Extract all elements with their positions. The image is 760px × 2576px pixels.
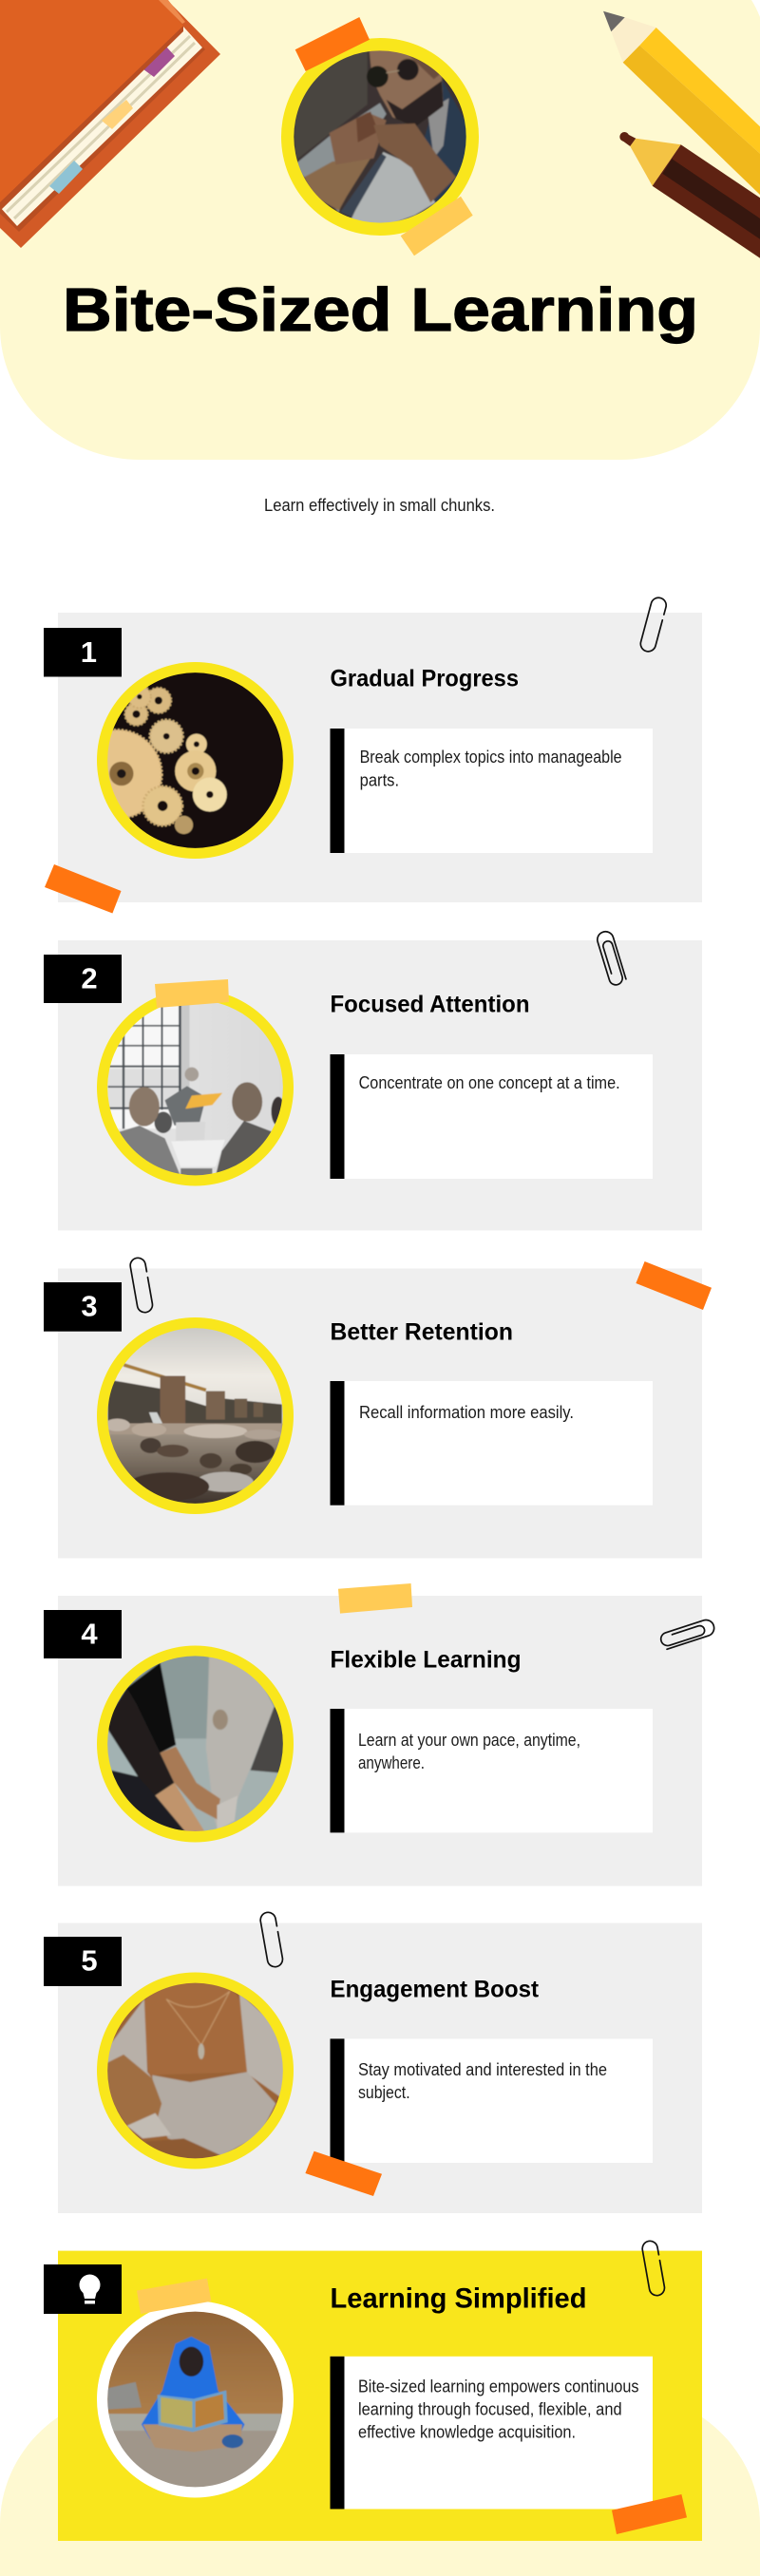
- header photo: man eating: [281, 38, 479, 236]
- panel: step 2 focused attention: [58, 940, 702, 1230]
- photo: ballet shoes: [97, 1645, 294, 1843]
- tape: orange conclusion: [612, 2494, 687, 2534]
- paperclip 2: [596, 930, 627, 987]
- text box: effective knowledge acquisition.: [358, 2422, 576, 2441]
- bottom background blob: [0, 2392, 760, 2576]
- paperclip 5: [259, 1911, 284, 1968]
- number badge 2: 2: [81, 961, 98, 995]
- tape: orange step 1: [45, 864, 122, 914]
- tape: yellow conclusion: [137, 2279, 211, 2314]
- number badge 5: 5: [81, 1943, 98, 1978]
- text box: [331, 1381, 653, 1506]
- number badge 3: 3: [81, 1290, 98, 1323]
- text box: Recall information more easily.: [359, 1402, 574, 1422]
- panel: step 4 flexible learning: [58, 1596, 702, 1886]
- text box: parts.: [360, 769, 399, 790]
- photo: gears: [97, 662, 294, 859]
- number badge 1: [44, 628, 122, 676]
- text box: Concentrate on one concept at a time.: [359, 1072, 620, 1092]
- text box: Learn at your own pace, anytime,: [358, 1730, 580, 1750]
- icon: lightbulb: [80, 2274, 101, 2304]
- paperclip 1: [639, 596, 668, 653]
- photo: presenter: [97, 990, 294, 1185]
- paperclip 6: [641, 2240, 666, 2297]
- heading: Engagement Boost: [331, 1977, 540, 2003]
- text box: subject.: [358, 2082, 410, 2102]
- heading: Focused Attention: [331, 992, 530, 1018]
- title: Bite-Sized Learning: [63, 275, 698, 344]
- paperclip 3: [129, 1257, 154, 1314]
- text box: anywhere.: [358, 1752, 425, 1772]
- text box: learning through focused, flexible, and: [358, 2398, 622, 2418]
- text box: [331, 1709, 653, 1832]
- heading: Flexible Learning: [331, 1647, 521, 1674]
- number badge 3: [44, 1282, 122, 1332]
- illustration: brown pencil: [619, 132, 760, 258]
- tape: yellow step 2: [155, 979, 229, 1008]
- header background blob: [0, 0, 760, 460]
- subtitle: Learn effectively in small chunks.: [264, 495, 495, 515]
- text box: [331, 2357, 653, 2510]
- text box: Bite-sized learning empowers continuous: [358, 2377, 638, 2396]
- number badge 1: 1: [81, 635, 97, 669]
- heading: Learning Simplified: [331, 2282, 587, 2314]
- illustration: yellow pencil: [603, 11, 760, 195]
- paperclip 4: [659, 1618, 716, 1650]
- illustration: orange book: [0, 0, 220, 248]
- text box: [331, 2038, 653, 2163]
- tape: yellow step 4: [338, 1583, 412, 1614]
- text box: [331, 1054, 653, 1179]
- heading: Gradual Progress: [331, 666, 519, 692]
- panel: step 1 gradual progress: [58, 613, 702, 902]
- number badge 2: [44, 955, 122, 1003]
- panel: step 5 engagement boost: [58, 1923, 702, 2213]
- panel: learning simplified conclusion: [58, 2251, 702, 2541]
- number badge 4: 4: [81, 1618, 98, 1651]
- tape: header yellow: [401, 197, 473, 256]
- tape: orange step 3: [636, 1261, 712, 1310]
- text box: [331, 729, 653, 853]
- photo: dam and river: [97, 1317, 294, 1514]
- photo: girl reading: [97, 2301, 294, 2498]
- text box: Stay motivated and interested in the: [358, 2059, 607, 2079]
- number badge 4: [44, 1610, 122, 1658]
- badge: lightbulb: [44, 2264, 122, 2314]
- number badge 5: [44, 1937, 122, 1986]
- tape: orange step 5: [305, 2151, 382, 2196]
- tape: header orange: [295, 17, 370, 71]
- text box: Break complex topics into manageable: [360, 747, 622, 767]
- heading: Better Retention: [331, 1319, 513, 1346]
- panel: step 3 better retention: [58, 1269, 702, 1558]
- photo: woman in white blouse: [97, 1972, 294, 2169]
